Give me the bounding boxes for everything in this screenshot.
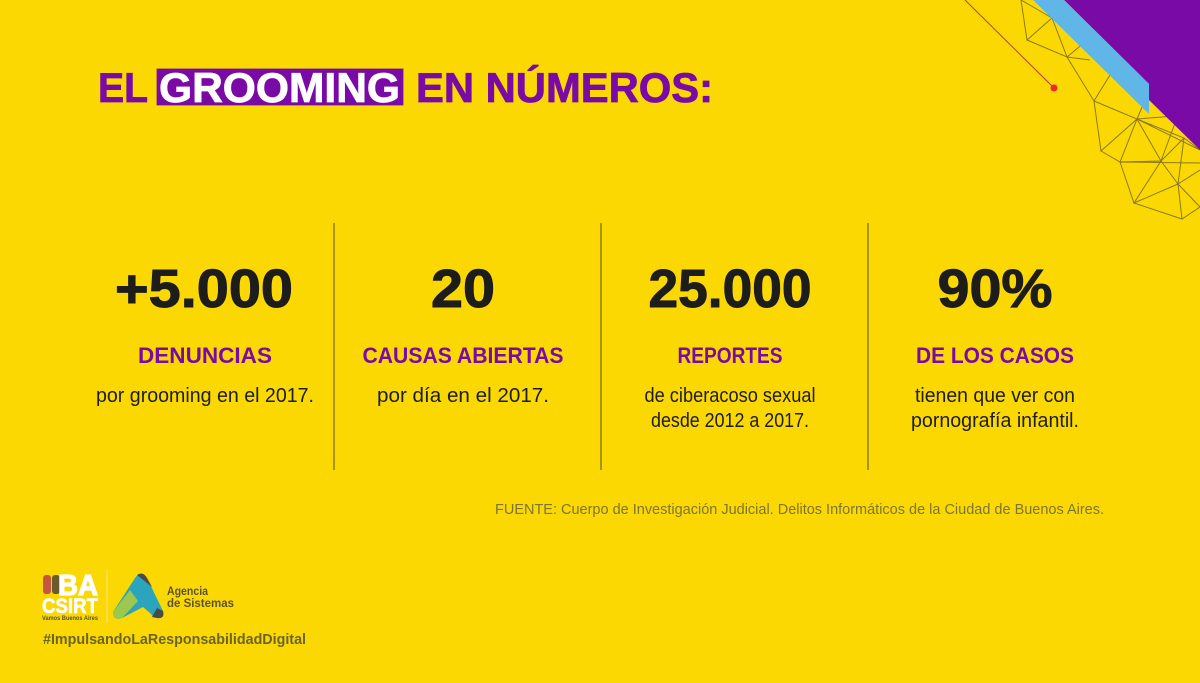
title highlight: GROOMING: GROOMING [159,64,400,111]
stat: de los casos: 90% [938,259,1052,319]
logo: BA CSIRT: BA [58,570,98,602]
title: EN NÚMEROS: [416,63,713,111]
stat: causas abiertas: CAUSAS ABIERTAS [362,343,564,368]
logo: BA CSIRT [42,570,99,622]
title [98,63,713,111]
stat: de los casos: tienen que ver con [915,385,1075,407]
logo: BA CSIRT: CSIRT [42,595,98,618]
stat: causas abiertas: por día en el 2017. [377,385,549,407]
stat: de los casos: DE LOS CASOS [916,343,1074,368]
hashtag: #ImpulsandoLaResponsabilidadDigital [43,631,306,648]
stat: causas abiertas [362,259,564,407]
stat: reportes [644,259,816,432]
stat: reportes: REPORTES [678,343,782,368]
stat: causas abiertas: 20 [431,259,495,319]
decoration: corner network and ribbons [965,0,1200,219]
stat: denuncias [96,259,314,407]
column dividers [334,223,868,470]
stat: de los casos [911,259,1079,432]
logo: Agencia de Sistemas [113,574,234,619]
stat: reportes: 25.000 [648,259,812,319]
stat: denuncias: DENUNCIAS [138,343,272,368]
stat: reportes: desde 2012 a 2017. [651,410,809,432]
logo: BA CSIRT: Vamos Buenos Aires [42,616,99,622]
source note: FUENTE: Cuerpo de Investigación Judicial. Delitos Informáticos de la Ciudad de Buenos Aires. [495,501,1104,518]
logo: Agencia de Sistemas: Agencia [167,584,208,598]
stat: reportes: de ciberacoso sexual [644,385,816,407]
logo divider [106,569,108,623]
title: EL [98,64,148,111]
stat: denuncias: por grooming en el 2017. [96,385,314,407]
logo: Agencia de Sistemas: de Sistemas [167,596,234,610]
stat: denuncias: +5.000 [115,259,293,319]
stat: de los casos: pornografía infantil. [911,410,1079,432]
